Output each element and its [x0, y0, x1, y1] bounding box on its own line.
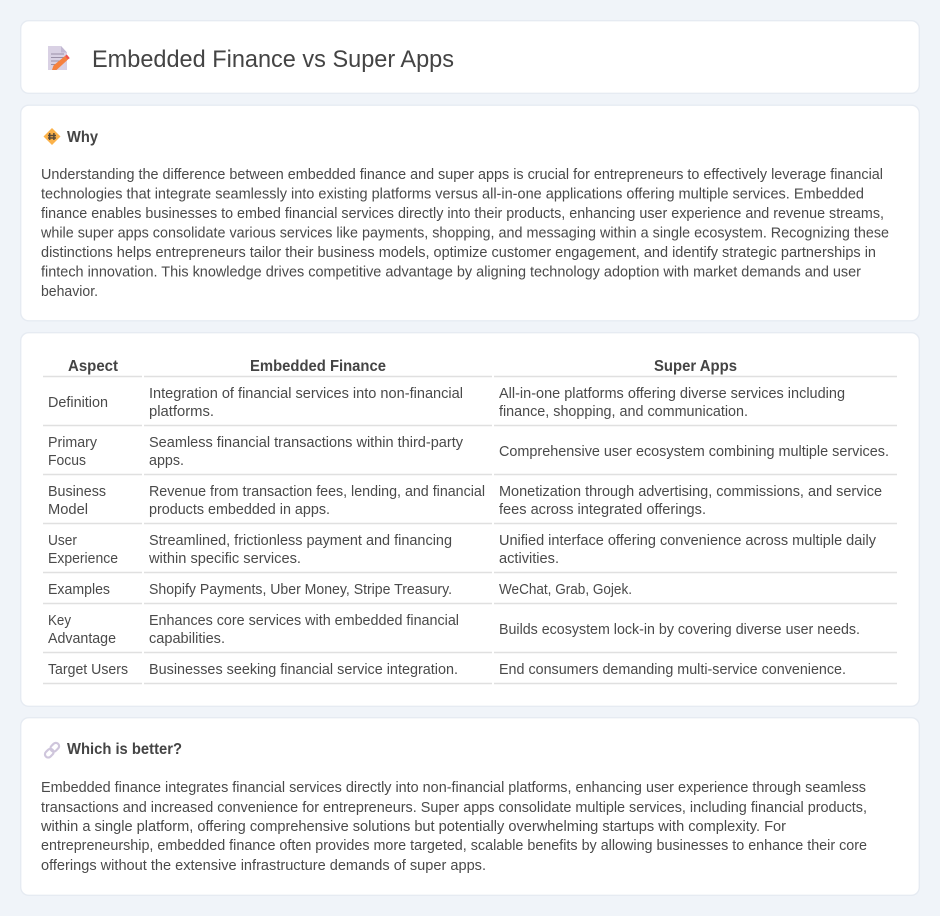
table header: Embedded Finance	[250, 358, 386, 375]
text block: why paragraph	[40, 167, 889, 300]
text block: why paragraph: Understanding the difference between embedded finance and super apps is crucial for entrepreneurs to effectively leverage financial	[41, 167, 883, 183]
panel: title card	[21, 21, 919, 93]
row: business model	[43, 484, 897, 524]
icon: document with pencil	[48, 46, 70, 70]
row: key advantage: Enhances core services with embedded financial	[149, 613, 459, 629]
text block: which is better paragraph: offerings without the extensive infrastructure demands of super apps.	[41, 858, 486, 874]
row: key advantage: Key	[48, 613, 72, 629]
row: business model: Business	[48, 484, 106, 500]
table header: Aspect	[68, 358, 118, 375]
row: business model: Monetization through advertising, commissions, and service	[499, 484, 882, 500]
row: primary focus	[43, 435, 897, 474]
icon: link	[44, 742, 60, 759]
row: definition: platforms.	[149, 404, 214, 420]
row: primary focus: Primary	[48, 435, 98, 451]
row: user experience: activities.	[499, 551, 559, 567]
row: definition: Integration of financial services into non-financial	[149, 386, 463, 402]
row: examples: WeChat, Grab, Gojek.	[499, 582, 632, 598]
row: user experience: within specific services.	[148, 551, 301, 567]
heading: why: Why	[67, 129, 98, 146]
row: key advantage	[43, 613, 897, 652]
row: user experience	[43, 533, 897, 572]
row: key advantage: capabilities.	[149, 631, 225, 647]
text block: which is better paragraph: entrepreneurship, embedded finance often provides more targeted, scalable benefits by allowing businesses to enhance their core	[41, 838, 867, 854]
row: definition	[43, 386, 897, 426]
row: examples: Shopify Payments, Uber Money, Stripe Treasury.	[149, 582, 452, 598]
row: business model: Model	[48, 502, 88, 518]
text block: why paragraph: behavior.	[41, 284, 98, 300]
row: user experience: Experience	[48, 551, 118, 567]
row: primary focus: Comprehensive user ecosystem combining multiple services.	[499, 444, 889, 460]
text block: which is better paragraph: transactions and increased convenience for entrepreneurs. Super apps consolidate multiple services, including financial products,	[41, 800, 867, 816]
row: definition: All-in-one platforms offering diverse services including	[499, 386, 845, 402]
text block: why paragraph: fintech innovation. This knowledge drives competitive advantage by aligning technology adoption with market demands and user	[41, 264, 861, 280]
panel: comparison table	[21, 333, 919, 706]
row: business model: Revenue from transaction fees, lending, and financial	[149, 484, 485, 500]
text block: which is better paragraph	[40, 780, 867, 874]
row: examples	[43, 582, 897, 604]
heading: which is better: Which is better?	[67, 741, 182, 758]
row: user experience: Streamlined, frictionless payment and financing	[149, 533, 452, 549]
text block: which is better paragraph: Embedded finance integrates financial services directly into non-financial platforms, enhancing user experience through seamless	[41, 780, 866, 796]
row: user experience: User	[48, 533, 77, 549]
icon: orange diamond	[44, 128, 60, 145]
row: primary focus: Seamless financial transactions within third-party	[149, 435, 464, 451]
row: target users: End consumers demanding multi-service convenience.	[499, 662, 846, 678]
row: primary focus: Focus	[48, 453, 86, 469]
text block: why paragraph: distinctions helps entrepreneurs tailor their business models, optimize customer engagement, and identify strategic partnerships in	[41, 245, 876, 261]
row: primary focus: apps.	[149, 453, 184, 469]
panel: why	[21, 105, 919, 321]
text block: which is better paragraph: within a single platform, offering comprehensive solutions but potentially overwhelming startups with complexity. For	[40, 819, 786, 835]
table header	[43, 358, 897, 376]
row: key advantage: Advantage	[48, 631, 116, 647]
row: business model: fees across integrated offerings.	[499, 502, 706, 518]
row: target users: Target Users	[48, 662, 128, 678]
table header: Super Apps	[654, 358, 737, 375]
text block: why paragraph: technologies that integrate seamlessly into existing platforms versus all-in-one applications offering multiple services. Embedded	[41, 186, 864, 202]
row: definition: finance, shopping, and communication.	[499, 404, 748, 420]
row: definition: Definition	[48, 395, 108, 411]
text block: why paragraph: finance enables businesses to embed financial services directly into their products, enhancing user experience and revenue streams,	[41, 206, 884, 222]
row: business model: products embedded in apps.	[149, 502, 330, 518]
panel: which is better	[21, 718, 919, 895]
row: key advantage: Builds ecosystem lock-in by covering diverse user needs.	[499, 622, 860, 638]
row: target users: Businesses seeking financial service integration.	[149, 662, 458, 678]
title: Embedded Finance vs Super Apps	[92, 46, 454, 73]
text block: why paragraph: while super apps consolidate various services like payments, shopping, and messaging within a single ecosystem. Recognizing these	[40, 225, 889, 241]
row: user experience: Unified interface offering convenience across multiple daily	[499, 533, 877, 549]
row: target users	[43, 662, 897, 684]
row: examples: Examples	[48, 582, 110, 598]
